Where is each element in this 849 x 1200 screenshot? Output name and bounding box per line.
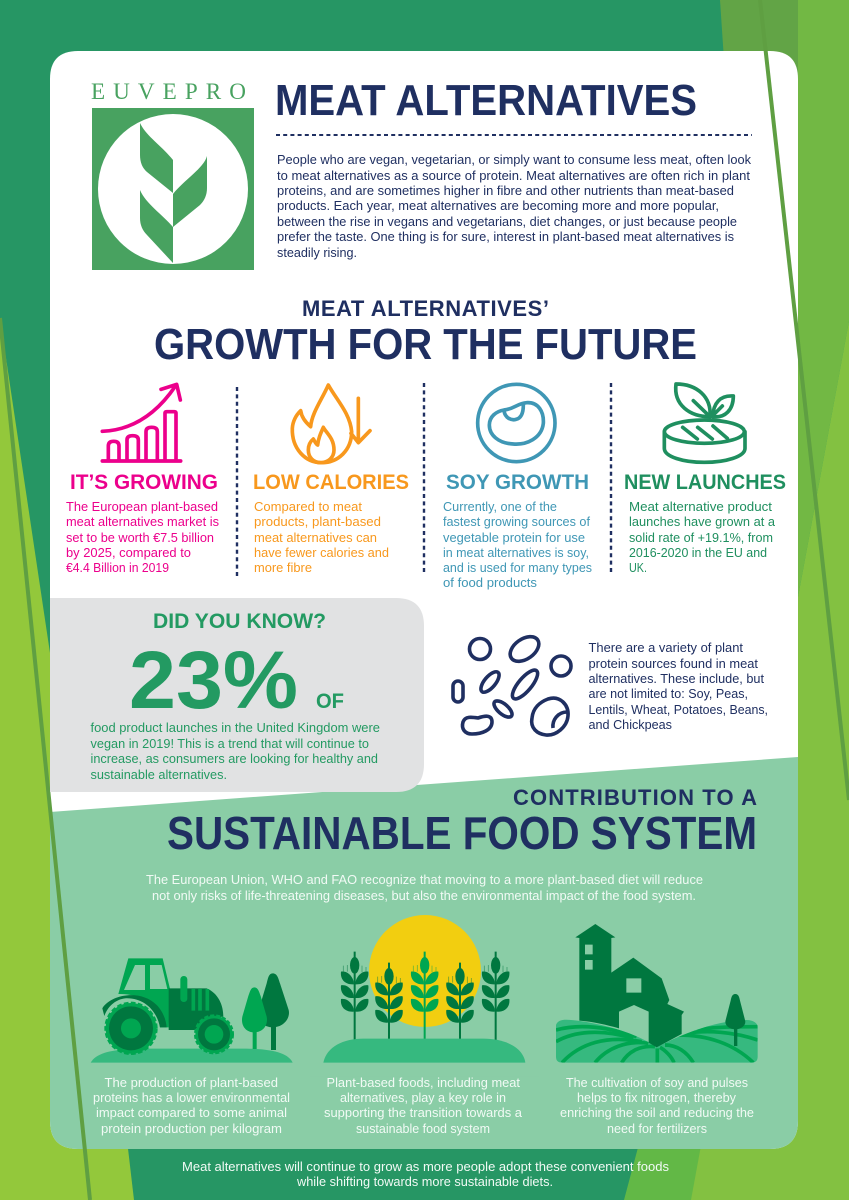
footer text: Meat alternatives will continue to grow as more people adopt these convenient foods [182,1160,669,1174]
sustainability heading [167,785,757,859]
logo: EUVEPRO [91,79,254,270]
body text: launches have grown at a [629,515,775,529]
body text: UK. [629,561,647,575]
icon: rising bar chart [102,384,181,461]
plant protein text: There are a variety of plant [588,641,744,655]
heading: IT’S GROWING [70,471,218,494]
intro text: to meat alternatives as a source of protein. Meat alternatives are often rich in plant [277,169,751,183]
body text: Compared to meat [254,500,363,514]
caption: lower environmental impact: proteins has a lower environmental [93,1091,290,1105]
sustainability intro: The European Union, WHO and FAO recognize that moving to a more plant-based diet will reduce [146,873,703,887]
heading: LOW CALORIES [253,471,409,494]
body text: Currently, one of the [443,500,557,514]
caption: nitrogen fixing: need for fertilizers [607,1122,707,1136]
icon: flame with down arrow [292,385,370,463]
body text: vegetable protein for use [443,531,585,545]
body text: products, plant-based [254,515,381,529]
grey callout box [50,598,424,792]
sustainability heading: CONTRIBUTION TO A [513,785,757,810]
body text: in meat alternatives is soy, [443,546,589,560]
body text [66,500,219,575]
icon: bean in circle [478,384,555,462]
panel: did you know [50,598,424,792]
intro text: proteins, and are sometimes higher in fibre and other nutrients than meat-based [277,184,734,198]
logo emblem [92,108,254,270]
column dividers [237,383,611,577]
growth heading: MEAT ALTERNATIVES’ [302,296,549,321]
body text: more fibre [254,561,312,575]
big statistic: 23% [129,635,298,726]
icon: assorted beans and pulses [453,632,571,735]
plant protein text: and Chickpeas [588,718,672,732]
title divider [276,134,752,136]
caption: supporting the transition: supporting the transition towards a [324,1106,522,1120]
footer band [127,1140,702,1200]
body text [443,500,592,590]
illustration: tractor and trees [91,958,293,1063]
mint sustainability panel [50,757,798,1149]
callout text: food product launches in the United Kingdom were [90,721,380,735]
callout text: increase, as consumers are looking for healthy and [90,752,378,766]
body text: set to be worth €7.5 billion [66,531,214,545]
title: MEAT ALTERNATIVES [275,76,697,125]
illustration: barn on hills [556,924,758,1063]
intro text: between the rise in vegans and vegetarians, diet changes, or just because people [277,215,737,229]
panel: it's growing [66,384,219,575]
sustainability intro [146,873,703,903]
sustainability heading: SUSTAINABLE FOOD SYSTEM [167,807,757,859]
intro text: People who are vegan, vegetarian, or simply want to consume less meat, often look [277,153,752,167]
body text: meat alternatives can [254,531,377,545]
statistic suffix: OF [316,690,344,713]
caption: nitrogen fixing: helps to fix nitrogen, thereby [577,1091,737,1105]
body text [629,500,775,575]
plant protein text: Lentils, Wheat, Potatoes, Beans, [588,703,768,717]
plant protein text: alternatives. These include, but [588,672,765,686]
footer text: while shifting towards more sustainable diets. [296,1175,553,1189]
caption: nitrogen fixing: enriching the soil and reducing the [560,1106,754,1120]
body text: of food products [443,576,537,590]
heading: SOY GROWTH [446,471,589,494]
body text: solid rate of +19.1%, from [629,531,773,545]
caption: nitrogen fixing [560,1076,754,1136]
body text: have fewer calories and [254,546,389,560]
panel: new launches [624,384,786,575]
caption: lower environmental impact: impact compared to some animal [96,1106,287,1120]
sustainability intro: not only risks of life-threatening diseases, but also the environmental impact of the food system. [152,889,696,903]
body text: fastest growing sources of [443,515,591,529]
callout text: sustainable alternatives. [90,768,227,782]
caption: lower environmental impact: protein production per kilogram [101,1122,282,1136]
intro text: steadily rising. [277,246,357,260]
body text: and is used for many types [443,561,592,575]
plant protein text: protein sources found in meat [588,657,759,671]
panel: soy growth [443,384,592,590]
panel: low calories [253,385,409,575]
caption: supporting the transition: sustainable food system [356,1122,490,1136]
footer text [182,1160,669,1189]
caption: nitrogen fixing: The cultivation of soy and pulses [566,1076,748,1090]
caption: lower environmental impact: The production of plant-based [104,1076,278,1090]
body text: meat alternatives market is [66,515,219,529]
body text: Meat alternative product [629,500,773,514]
body text: €4.4 Billion in 2019 [66,561,169,575]
intro text: products. Each year, meat alternatives are becoming more and more popular, [277,199,719,213]
intro text: prefer the taste. One thing is for sure, interest in plant-based meat alternatives is [277,230,734,244]
logo wordmark: EUVEPRO [91,79,254,104]
caption: supporting the transition [324,1076,522,1136]
growth heading: GROWTH FOR THE FUTURE [154,320,697,369]
body text [254,500,389,575]
caption: lower environmental impact [93,1076,290,1136]
icon: plant-based patty with leaves [664,384,745,462]
body text: 2016-2020 in the EU and [629,546,767,560]
callout heading: DID YOU KNOW? [153,610,326,633]
plant protein text [588,641,768,732]
callout text: vegan in 2019! This is a trend that will continue to [90,737,369,751]
caption: supporting the transition: Plant-based foods, including meat [326,1076,521,1090]
body text: The European plant-based [66,500,218,514]
body text: by 2025, compared to [66,546,191,560]
illustration: wheat and sun [310,915,540,1076]
heading: NEW LAUNCHES [624,471,786,494]
plant protein text: are not limited to: Soy, Peas, [588,687,748,701]
callout text [90,721,380,782]
growth heading [154,296,697,369]
intro text [277,153,752,260]
caption: supporting the transition: alternatives, play a key role in [340,1091,506,1105]
